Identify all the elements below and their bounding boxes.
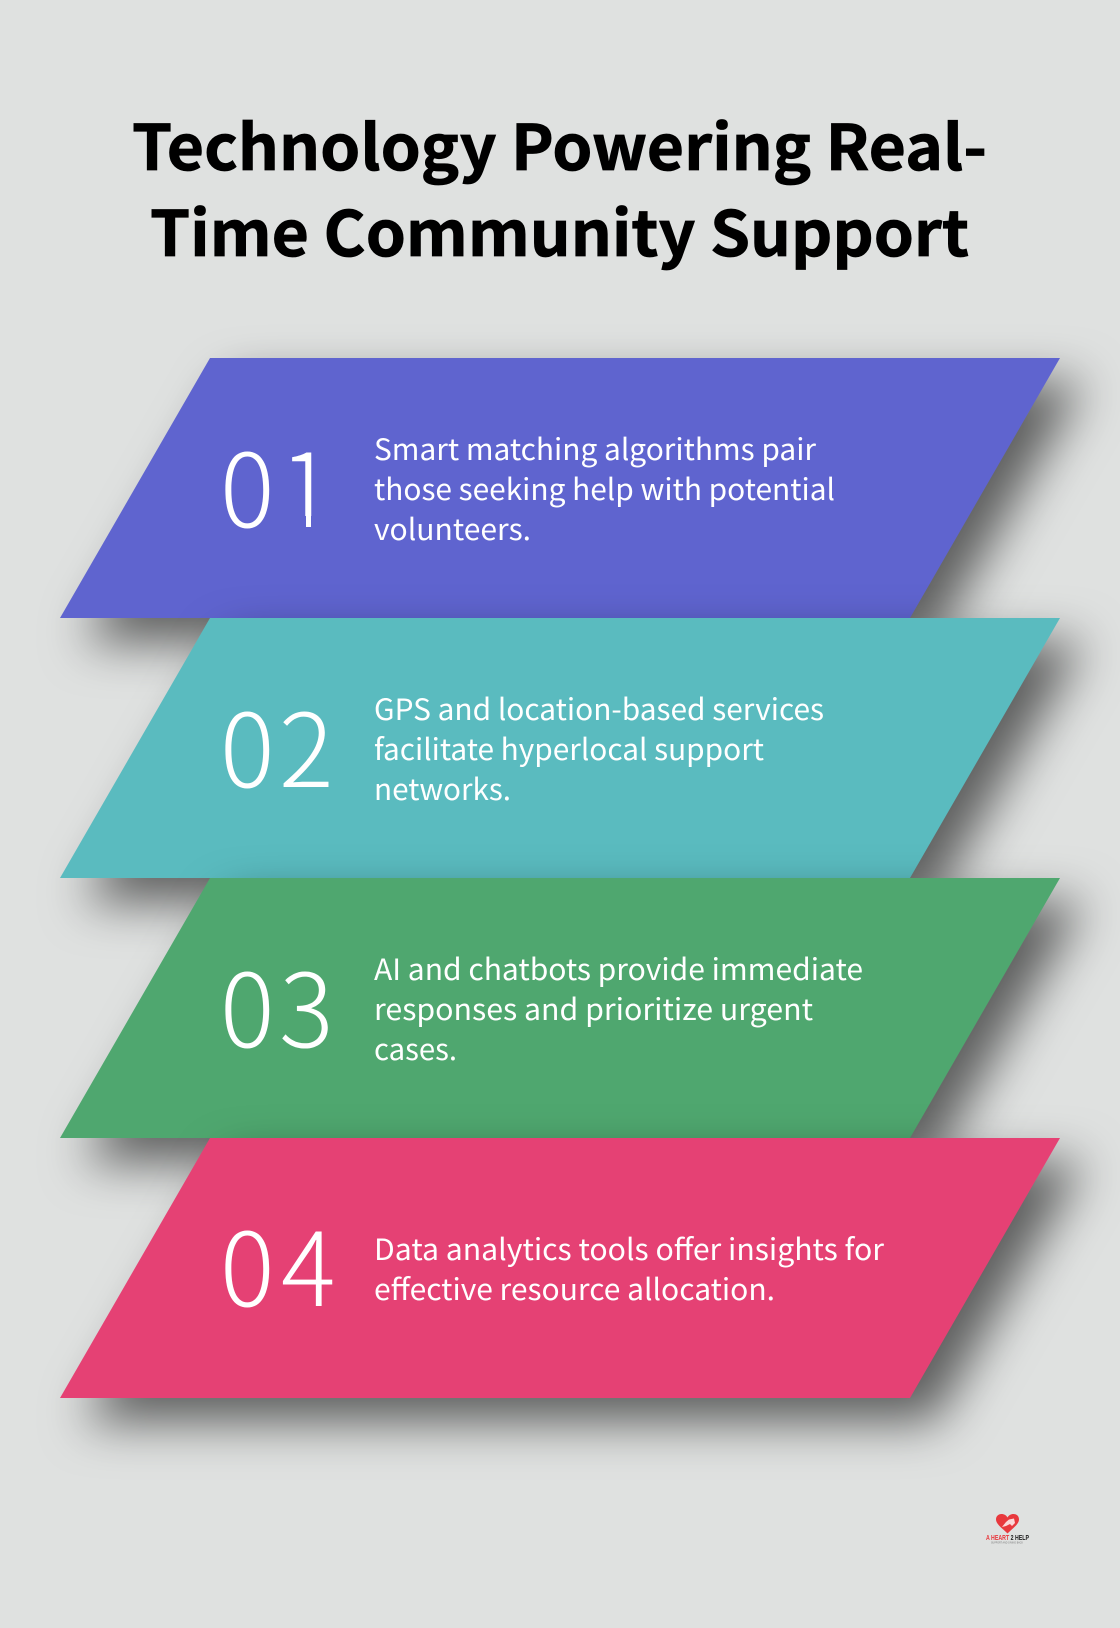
text 01: volunteers. <box>374 507 531 549</box>
text 04: Data analytics tools offer insights for <box>374 1227 885 1269</box>
text 02: facilitate hyperlocal support <box>374 727 764 769</box>
text 04: effective resource allocation. <box>374 1267 775 1309</box>
number 02: 02 <box>220 670 334 817</box>
panel: step 04 <box>60 1138 1060 1398</box>
icon: heart with hands <box>996 1514 1019 1534</box>
title: Time Community Support <box>150 183 969 274</box>
text 01: Smart matching algorithms pair <box>374 427 817 469</box>
logo wordmark: A HEART 2 HELP <box>986 1535 1029 1542</box>
panel shape 02 <box>60 618 1060 878</box>
text 02: networks. <box>374 767 511 809</box>
text 01 <box>374 427 835 549</box>
text 03 <box>374 947 863 1069</box>
text 02 <box>374 687 824 809</box>
panel shape 01 <box>60 358 1060 618</box>
title: Technology Powering Real- <box>132 97 987 188</box>
panel: step 01 <box>60 358 1060 618</box>
text 04 <box>374 1227 885 1309</box>
title <box>132 97 987 274</box>
text 03: responses and prioritize urgent <box>374 987 813 1029</box>
text 01: those seeking help with potential <box>374 467 835 509</box>
number 04: 04 <box>220 1189 336 1336</box>
number 03: 03 <box>220 930 334 1077</box>
logo tagline: SUPPORT AND GIVING BACK <box>991 1542 1023 1544</box>
panel shape 04 <box>60 1138 1060 1398</box>
text 03: AI and chatbots provide immediate <box>374 947 863 989</box>
panel: step 03 <box>60 878 1060 1138</box>
text 02: GPS and location-based services <box>374 687 824 729</box>
logo <box>986 1514 1029 1544</box>
number 01: 01 <box>220 410 334 557</box>
panel: step 02 <box>60 618 1060 878</box>
text 03: cases. <box>374 1027 457 1069</box>
panel shape 03 <box>60 878 1060 1138</box>
